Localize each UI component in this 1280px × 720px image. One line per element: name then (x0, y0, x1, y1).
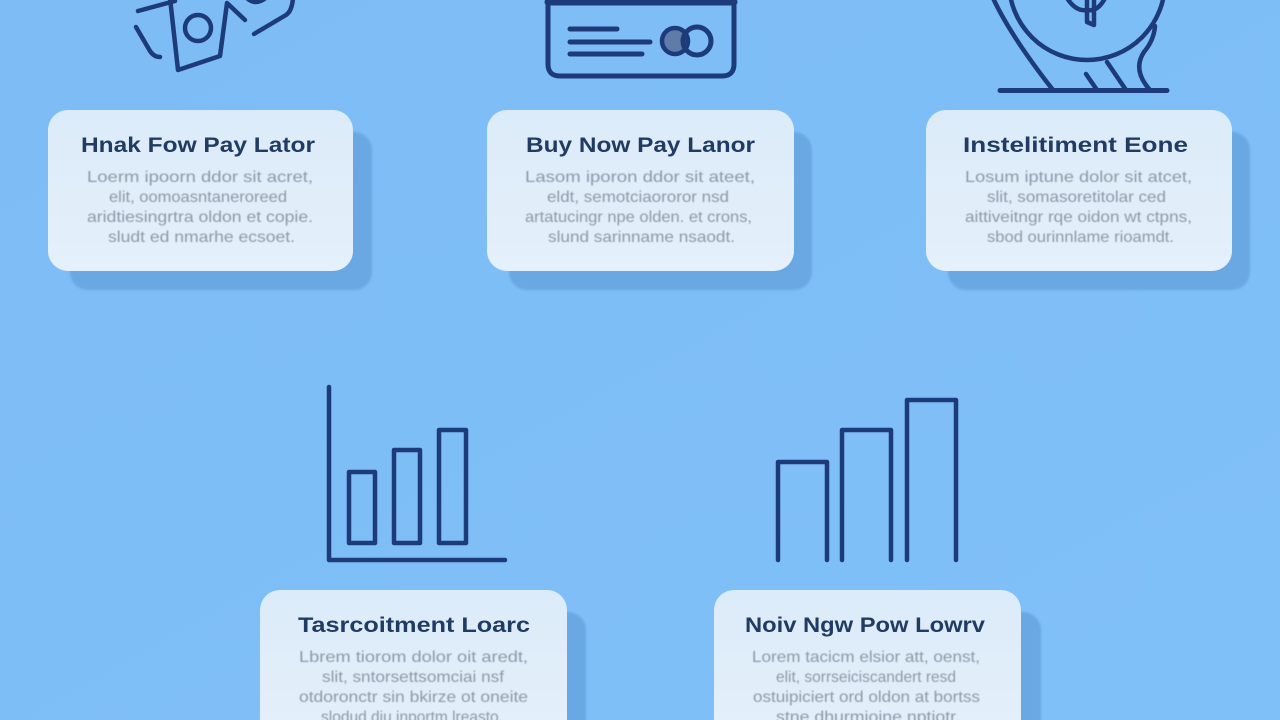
text block: card 2: Lasom iporon ddor sit ateet, (525, 169, 755, 186)
text block: card 1: sludt ed nmarhe ecsoet. (108, 229, 295, 246)
panel: card 1 (48, 110, 372, 290)
text block: card 1: aridtiesingrtra oldon et copie. (87, 209, 313, 226)
text block: card 4: otdoronctr sin bkirze ot oneite (299, 689, 528, 706)
heading: card 5: Noiv Ngw Pow Lowrv (745, 614, 985, 637)
text block: card 2: eldt, semotciaororor nsd (547, 189, 729, 206)
heading: card 2: Buy Now Pay Lanor (526, 134, 755, 157)
icon: rising columns (778, 400, 956, 560)
panel: card 4 (260, 590, 586, 720)
text block: card 2: artatucingr npe olden. et crons, (525, 209, 752, 226)
text block: card 3: Losum iptune dolor sit atcet, (965, 169, 1192, 186)
text block: card 3: slit, somasoretitolar ced (987, 189, 1166, 206)
text block: card 4 (299, 649, 528, 720)
text block: card 3: sbod ourinnlame rioamdt. (987, 229, 1174, 246)
text block: card 3 (965, 169, 1192, 246)
text block: card 1 (87, 169, 313, 246)
text block: card 2 (525, 169, 755, 246)
heading: card 1: Hnak Fow Pay Lator (81, 134, 315, 157)
text block: card 1: Loerm ipoorn ddor sit acret, (87, 169, 313, 186)
text block: card 5: elit, sorrseiciscandert resd (776, 669, 956, 686)
text block: card 4: slit, sntorsettsomciai nsf (322, 669, 505, 686)
text block: card 5 (752, 649, 980, 720)
heading: card 4: Tasrcoitment Loarc (298, 614, 530, 637)
icon: credit card (548, 0, 734, 76)
text block: card 4: Lbrem tiorom dolor oit aredt, (299, 649, 528, 666)
text block: card 5: ostuipiciert ord oldon at bortss (753, 689, 980, 706)
panel: card 3 (926, 110, 1250, 290)
icon: banknotes (136, 0, 293, 70)
panel: card 5 (714, 590, 1041, 720)
panel: card 2 (487, 110, 812, 290)
text block: card 2: slund sarinname nsaodt. (548, 229, 735, 246)
icon: coin on stand (993, 0, 1167, 90)
icon: bar chart with axes (329, 387, 505, 560)
heading: card 3: Instelitiment Eone (963, 134, 1188, 157)
text block: card 1: elit, oomoasntaneroreed (109, 189, 287, 206)
text block: card 5: Lorem tacicm elsior att, oenst, (752, 649, 980, 666)
text block: card 3: aittiveitngr rqe oidon wt ctpns, (965, 209, 1192, 226)
